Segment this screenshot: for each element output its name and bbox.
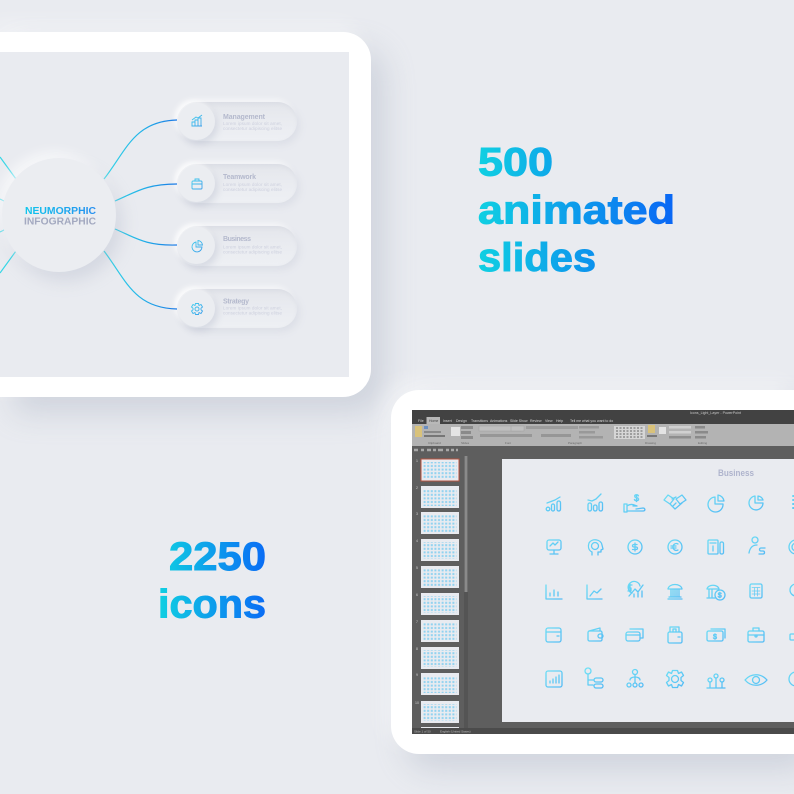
ribbon: Paragraph [568, 441, 582, 445]
title bar: Tell me what you want to do [570, 419, 613, 423]
icon: head with dollar [588, 540, 603, 555]
slide thumbnails: 1 [416, 459, 418, 463]
icon: rising bars [546, 497, 560, 511]
label: Teamwork: Lorem ipsum dolor sit amet, [223, 182, 282, 187]
icon: sliders [707, 674, 725, 688]
icon: wallet [546, 628, 561, 642]
title bar: Animations [490, 419, 508, 423]
icon grid [546, 493, 794, 688]
label: Strategy [223, 298, 282, 316]
status bar: Slide 1 of 50 [414, 730, 431, 734]
icon: dollar coin [628, 540, 642, 554]
title bar: Home [429, 419, 438, 423]
title bar: Help [556, 419, 563, 423]
icon: calculator [750, 584, 762, 598]
slide thumbnails: 2 [416, 486, 418, 490]
slide thumbnails: 10 [415, 701, 419, 705]
icon: briefcase [192, 179, 202, 189]
icon: bar chart [546, 585, 562, 599]
slide text and icons [24, 114, 282, 316]
label: Business [223, 236, 282, 254]
icon: list [793, 496, 794, 508]
title bar: Icons_Light_Layer - PowerPoint [690, 411, 741, 415]
pill: Strategy [177, 289, 297, 328]
ribbon: Font [505, 441, 511, 445]
icon: pie [708, 495, 724, 512]
slide thumbnails: 8 [416, 647, 418, 651]
icon: pie [192, 240, 202, 252]
title: NEUMORPHIC INFOGRAPHIC [24, 205, 96, 228]
ribbon: Drawing [645, 441, 656, 445]
slide thumbnails: 4 [416, 539, 418, 543]
icon: presentation [547, 540, 561, 554]
slide thumbnails: 6 [416, 593, 418, 597]
panel: neumorphic slide preview [0, 32, 371, 397]
label: Strategy: Lorem ipsum dolor sit amet, [223, 306, 282, 310]
icon: line chart [587, 585, 602, 599]
icon: hand with dollar [624, 493, 645, 512]
pill: Business [177, 226, 297, 266]
icon: wallet edge [790, 634, 794, 640]
title bar: Transitions [471, 419, 488, 423]
icon: target [789, 540, 794, 554]
title bar: Insert [443, 419, 452, 423]
icon: coin and chart [628, 581, 643, 597]
icon: cards [626, 629, 643, 641]
label: Strategy: Strategy [223, 298, 249, 306]
headline: 2250 icons: icons [158, 582, 266, 626]
icon: smile [789, 672, 794, 686]
slide thumbnails: 5 [416, 566, 418, 570]
ribbon: Slides [461, 441, 470, 445]
headline: 2250 icons: 2250 [169, 535, 266, 579]
central circle [2, 158, 116, 272]
label: Teamwork [223, 174, 282, 192]
label: Business: Business [223, 236, 251, 243]
label: Management: Management [223, 114, 266, 121]
icon: document with pen [708, 540, 724, 554]
icon: wallet with clasp [588, 628, 603, 641]
pill: Management [177, 102, 297, 141]
icon: euro coin [668, 540, 682, 554]
connector lines [0, 119, 177, 310]
pill: Teamwork [177, 164, 297, 203]
title: NEUMORPHIC INFOGRAPHIC: NEUMORPHIC [25, 205, 96, 217]
icon: circle [790, 584, 794, 596]
ribbon: Editing [698, 441, 708, 445]
label: Management: consectetur adipiscing elitse [223, 126, 282, 131]
icon: gear [192, 304, 202, 314]
icon: hierarchy [585, 668, 603, 688]
icon: hand with dollar: $ [634, 493, 639, 503]
label: Business: Lorem ipsum dolor sit amet, [223, 244, 282, 250]
slide thumbnails: 3 [416, 512, 418, 516]
slide thumbnails [415, 459, 459, 729]
ribbon [412, 424, 794, 446]
title bar: Slide Show [510, 419, 528, 423]
label: Teamwork: Teamwork [223, 174, 256, 181]
slide canvas [0, 52, 349, 377]
application window [412, 410, 794, 734]
headline: 500 animated slides: slides [478, 236, 596, 280]
headline: 500 animated slides: 500 [478, 140, 553, 184]
slide thumbnails: 7 [416, 620, 418, 624]
title bar: Review [530, 419, 542, 423]
icon: org chart [627, 670, 643, 687]
headline: 500 animated slides: animated [478, 188, 675, 232]
title: NEUMORPHIC INFOGRAPHIC: INFOGRAPHIC [24, 216, 96, 228]
label: Teamwork: consectetur adipiscing elitse [223, 187, 282, 192]
icon: bank [668, 584, 682, 599]
icon: eye [745, 675, 767, 685]
headline: 2250 icons [158, 535, 266, 626]
title bar: Design [456, 419, 467, 423]
ribbon: Clipboard [428, 441, 441, 445]
workspace background [412, 410, 794, 734]
icon: banknotes [707, 629, 725, 641]
heading: Business: Business [718, 468, 754, 479]
icon: chart [192, 115, 202, 126]
slide thumbnails: 9 [416, 673, 418, 677]
icon: person with dollar [749, 537, 765, 554]
title bar: View [545, 419, 553, 423]
title bar [412, 410, 794, 424]
icon: gear [666, 670, 684, 688]
icon: handshake [664, 495, 686, 509]
thumbnail scrollbar [464, 456, 468, 728]
status bar: English (United States) [440, 730, 471, 734]
icon: bank and dollar: $ [718, 592, 722, 600]
quick toolbar [414, 449, 458, 451]
icon: locked wallet [668, 627, 682, 643]
status bar [412, 728, 794, 734]
icon: bank and dollar [707, 585, 725, 600]
icon: growth bars [588, 494, 602, 511]
label: Management: Lorem ipsum dolor sit amet, [223, 121, 282, 126]
label: Strategy: consectetur adipiscing elitse [223, 310, 282, 316]
label: Management [223, 114, 282, 131]
slide: Business icons [502, 459, 794, 722]
panel: PowerPoint screenshot [391, 390, 794, 754]
icon: banknotes: $ [713, 634, 717, 641]
icon: donut [749, 496, 763, 510]
icon: dashboard [546, 671, 562, 687]
title bar: File [418, 419, 424, 423]
label: Business: consectetur adipiscing elitse [223, 250, 282, 254]
icon: briefcase [748, 628, 764, 642]
